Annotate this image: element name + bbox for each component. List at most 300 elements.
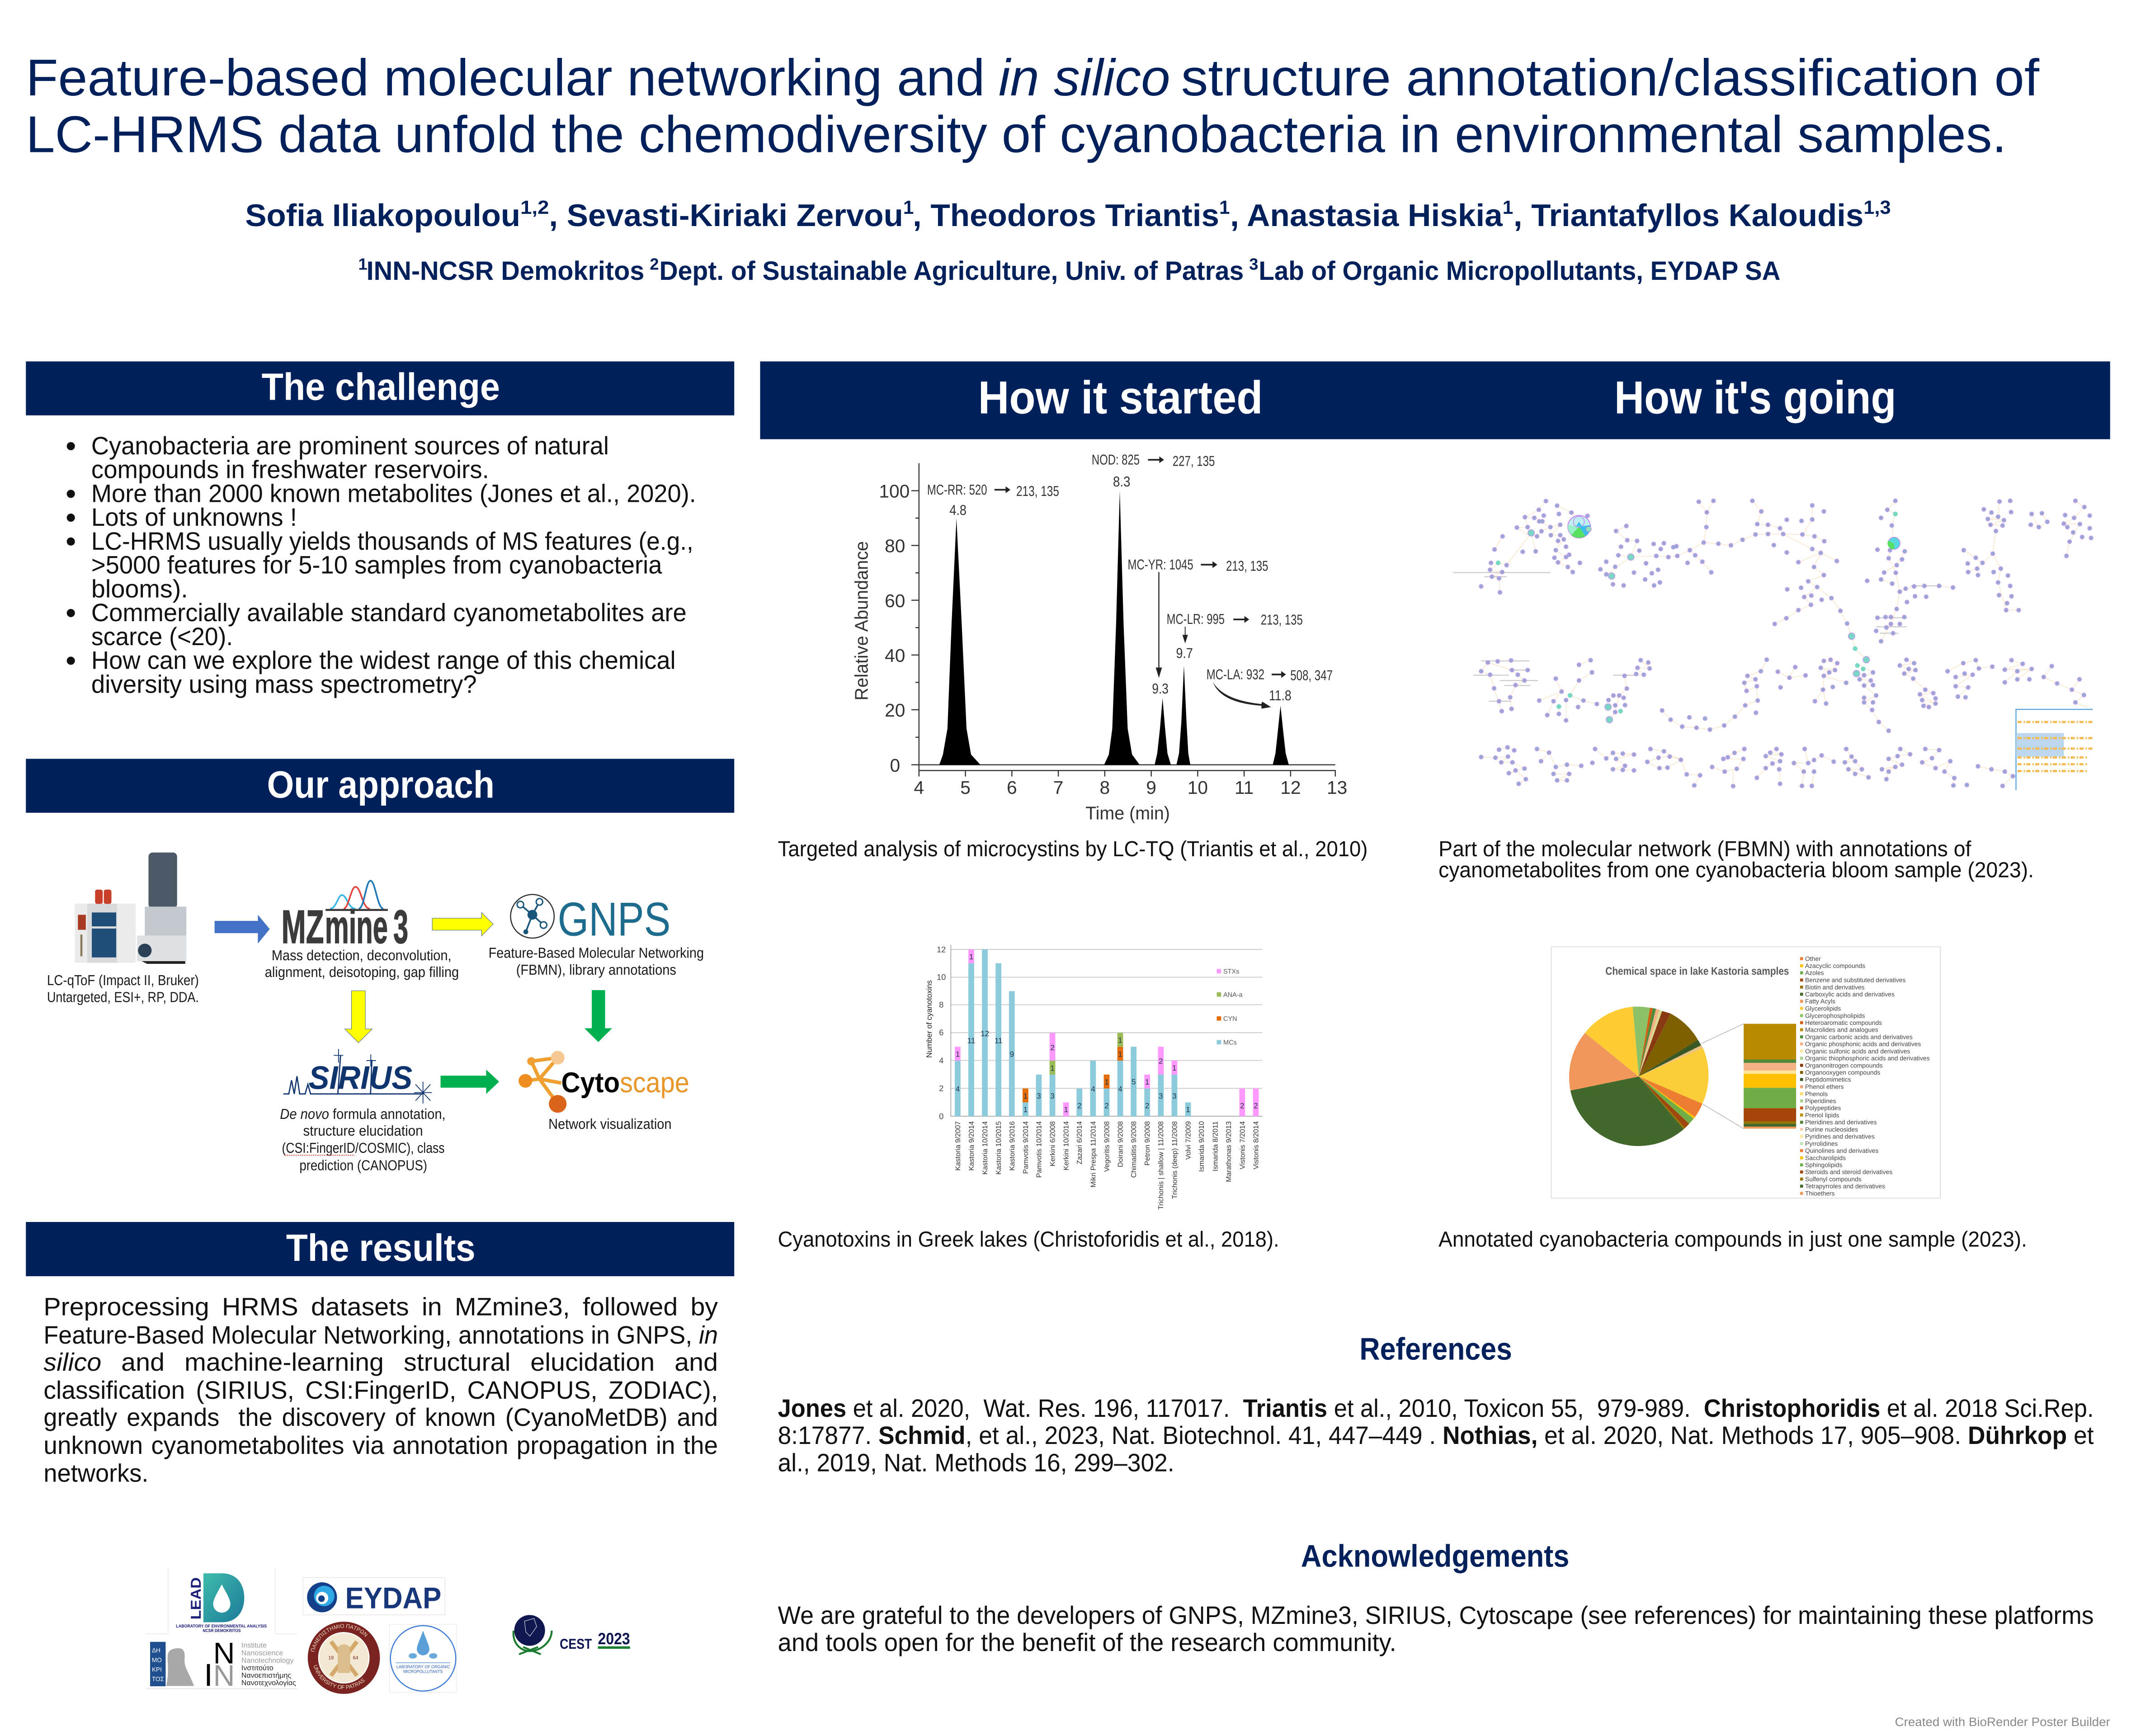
bar chart values: 4	[956, 1086, 960, 1094]
logo: Demokritos / INN: ΤΟΣ	[152, 1675, 165, 1683]
bar chart values: 11	[995, 1038, 1003, 1046]
text block: challenge bullets: More than 2000 known metabolites (Jones et al., 2020).	[91, 479, 696, 507]
network: overview inset	[2016, 709, 2093, 790]
caption: SIRIUS: (CSI:FingerID/COSMIC), class	[282, 1141, 445, 1157]
chromatogram peak labels: MC-YR: 1045	[1127, 557, 1193, 574]
logo: Demokritos / INN: Institute	[241, 1642, 267, 1651]
logo: Demokritos / INN: Nanoscience	[241, 1650, 283, 1658]
logo: CEST 2023: 2023	[598, 1629, 631, 1648]
authors: 1	[1219, 196, 1230, 218]
bar chart values: 2	[1159, 1058, 1163, 1066]
chromatogram y ticks: 100	[879, 481, 910, 502]
chromatogram y ticks: 80	[885, 536, 905, 557]
text block: results: unknown cyanometabolites via annotation propagation in the	[43, 1431, 718, 1459]
bar chart values: 2	[1254, 1103, 1258, 1111]
logo: LEAD: NCSR DEMOKRITOS	[203, 1628, 240, 1633]
text block: challenge bullets	[67, 431, 696, 698]
bar chart y axis labels: 8	[939, 1000, 944, 1010]
chromatogram peak labels: MC-RR: 520	[927, 482, 987, 499]
pie legend: Organic sulfonic acids and derivatives	[1805, 1048, 1911, 1055]
pie legend: Pyridines and derivatives	[1805, 1133, 1876, 1140]
pie legend: Organonitrogen compounds	[1805, 1062, 1884, 1069]
network: medium annotated node fill	[1531, 533, 1866, 720]
panel: how it started / how it's going header: How it's going	[1614, 373, 1896, 425]
caption: LC-qToF	[47, 973, 199, 1006]
bar chart legend: STXs	[1223, 968, 1240, 976]
caption: GNPS: (FBMN), library annotations	[516, 962, 676, 979]
bar chart legend: ANA-a	[1223, 991, 1243, 1000]
bar chart x labels: Ismarida 9/2010	[1198, 1121, 1207, 1172]
logo: University of Patras seal	[308, 1622, 380, 1694]
bar chart y axis labels: 2	[939, 1085, 944, 1094]
logo: Demokritos / INN: N	[213, 1636, 235, 1670]
chromatogram axis titles: Relative Abundance	[851, 541, 872, 700]
caption: molecular network: cyanometabolites from one cyanobacteria bloom sample (2023).	[1438, 859, 2034, 883]
bar chart values: 1	[1050, 1065, 1055, 1074]
logo: GNPS: GNPS	[558, 893, 670, 946]
text block: acknowledgements: We are grateful to the developers of GNPS, MZmine3, SIRIUS, Cytoscape (see references) for maintaining these platforms	[778, 1601, 2094, 1629]
panel: the challenge header	[26, 361, 734, 415]
pie legend: Azacyclic compounds	[1805, 962, 1866, 969]
logo: University of Patras seal: 64	[353, 1655, 358, 1661]
chromatogram peak labels: 9.3	[1152, 681, 1169, 698]
pie legend: Glycerophospholipids	[1805, 1012, 1866, 1019]
text block: challenge bullets: blooms).	[91, 574, 188, 603]
pie legend: Heteroaromatic compounds	[1805, 1019, 1883, 1026]
bar chart y axis labels: Number of cyanotoxins	[925, 980, 934, 1058]
heading: references: References	[1359, 1331, 1512, 1366]
pie legend: Quinolines and derivatives	[1805, 1147, 1880, 1154]
chromatogram peak labels: 4.8	[949, 503, 967, 519]
bar chart values: 4	[1091, 1086, 1095, 1094]
title	[26, 50, 2040, 164]
pie legend: Organic phosphonic acids and derivatives	[1805, 1041, 1922, 1047]
chromatogram axis titles	[851, 541, 1170, 824]
text block: references: Jones et al. 2020, Wat. Res. 196, 117017. Triantis et al., 2010, Toxicon 55, 979-989. Christophoridis et al. 2018 Sci.Rep.	[778, 1394, 2094, 1422]
text block: challenge bullets: LC-HRMS usually yields thousands of MS features (e.g.,	[91, 527, 693, 555]
pie legend: Steroids and steroid derivatives	[1805, 1169, 1893, 1175]
caption: LC-qToF: Untargeted, ESI+, RP, DDA.	[47, 990, 199, 1006]
logo: MZmine 3: MZ	[282, 902, 324, 954]
text block: results: networks.	[43, 1458, 148, 1487]
pie legend: Sphingolipids	[1805, 1162, 1844, 1169]
chromatogram x ticks: 6	[1007, 778, 1017, 798]
logo: EYDAP	[303, 1578, 445, 1615]
chart: chromatogram	[851, 452, 1347, 824]
logo: SIRIUS: SIRIUS	[309, 1060, 412, 1097]
pie legend: Prenol lipids	[1805, 1112, 1840, 1118]
text block: references: al., 2019, Nat. Methods 16, 299–302.	[778, 1448, 1174, 1477]
bar chart values: 1	[1023, 1107, 1028, 1115]
bar chart values: 2	[1104, 1103, 1109, 1111]
bar chart values: 4	[1118, 1086, 1122, 1094]
bar chart values	[956, 954, 1258, 1115]
chromatogram x ticks: 12	[1280, 778, 1301, 798]
chromatogram y ticks: 20	[885, 700, 905, 721]
bar chart x labels: Kastoria 10/2015	[995, 1121, 1004, 1175]
chromatogram peak labels: 9.7	[1176, 646, 1193, 662]
text block: acknowledgements: and tools open for the benefit of the research community.	[778, 1628, 1396, 1656]
logo: Demokritos / INN: Νανοτεχνολογίας	[241, 1680, 297, 1688]
bar chart values: 1	[1186, 1107, 1190, 1115]
bar chart x labels: Doirani 9/2008	[1117, 1121, 1125, 1167]
pie legend: Carboxylic acids and derivatives	[1805, 991, 1896, 998]
logo: MZmine 3	[282, 881, 408, 954]
caption: targeted analysis: Targeted analysis of microcystins by LC-TQ (Triantis et al., 2010)	[778, 839, 1367, 862]
logo: LEAD: LABORATORY OF ENVIRONMENTAL ANALYSIS	[176, 1623, 267, 1629]
logo: MZmine 3: mine	[325, 902, 388, 954]
bar chart grid and axes	[951, 949, 1263, 1088]
network: second large annotated node	[1887, 537, 1900, 549]
arrow: blue to MZmine	[215, 915, 270, 943]
bar chart x labels: Mikri Prespa 11/2014	[1090, 1121, 1098, 1188]
bar chart values: 3	[1172, 1093, 1177, 1101]
bars: CYN	[1023, 1047, 1123, 1102]
caption: SIRIUS: De novo formula annotation,	[280, 1107, 446, 1123]
logo: LEAD	[146, 1568, 297, 1634]
caption: LC-qToF: LC-qToF (Impact II, Bruker)	[47, 973, 199, 989]
chart: cyanotoxins stacked bars	[925, 945, 1263, 1210]
panel: the challenge header: The challenge	[262, 366, 500, 408]
bar chart values: 2	[1240, 1103, 1245, 1111]
text block: references	[778, 1394, 2094, 1477]
chromatogram peak labels: 213, 135	[1261, 613, 1303, 629]
network nodes: purple rings	[1481, 501, 2091, 786]
arrow: yellow to GNPS	[432, 912, 493, 936]
title: in silico	[999, 50, 1170, 108]
pie legend: Pteridines and derivatives	[1805, 1119, 1878, 1126]
arrow: green SIRIUS to Cytoscape	[441, 1070, 499, 1094]
caption: MZmine: Mass detection, deconvolution,	[272, 948, 452, 964]
affiliations: 3	[1249, 255, 1259, 274]
bar chart values: 9	[1010, 1051, 1014, 1060]
chromatogram peak labels: MC-LA: 932	[1207, 667, 1264, 684]
text block: results: Feature-Based Molecular Networking, annotations in GNPS, in	[43, 1321, 718, 1349]
bar chart x labels: Chimaditis 9/2008	[1131, 1121, 1139, 1178]
bar chart values: 1	[969, 954, 973, 962]
bar chart y axis labels: 10	[937, 973, 947, 983]
chromatogram x ticks: 4	[914, 778, 925, 798]
bar chart values: 1	[956, 1051, 960, 1060]
chromatogram y ticks: 60	[885, 591, 905, 611]
text block: acknowledgements	[778, 1601, 2094, 1656]
bar chart values: 2	[1077, 1103, 1082, 1111]
pie legend	[1800, 955, 1931, 1197]
text block: challenge bullets: compounds in freshwater reservoirs.	[91, 455, 489, 484]
panel: our approach header: Our approach	[267, 764, 495, 806]
pie legend: Phenol ethers	[1805, 1084, 1845, 1090]
text block: results	[43, 1293, 719, 1487]
logo: CEST 2023	[514, 1615, 631, 1654]
logo: Laboratory of Organic Micropollutants: MICROPOLLUTANTS	[403, 1669, 443, 1674]
chromatogram peak labels: NOD: 825	[1092, 452, 1140, 469]
network: small annotated nodes	[1498, 514, 1896, 711]
bar chart values: 3	[1037, 1093, 1041, 1101]
bar chart values: 11	[967, 1038, 975, 1046]
text block: references: 8:17877. Schmid, et al., 2023, Nat. Biotechnol. 41, 447–449 . Nothias, et al. 2020, Nat. Methods 17, 905–908. Dührkop et	[778, 1421, 2094, 1449]
pie legend: Biotin and derivatives	[1805, 984, 1866, 991]
panel: how it started / how it's going header: How it started	[978, 373, 1263, 425]
authors: 1,2	[520, 196, 549, 218]
text block: challenge bullets: Commercially available standard cyanometabolites are	[91, 598, 687, 627]
chart: molecular network	[1453, 501, 2093, 790]
heading: acknowledgements: Acknowledgements	[1301, 1538, 1569, 1573]
bar chart values: 1	[1118, 1051, 1122, 1060]
logo: CEST 2023: CEST	[560, 1637, 593, 1653]
chromatogram x ticks: 13	[1327, 778, 1347, 798]
bar chart x labels: Kastoria 10/2014	[982, 1121, 990, 1175]
caption: cyanotoxins: Cyanotoxins in Greek lakes (Christoforidis et al., 2018).	[778, 1229, 1279, 1252]
logo: Cytoscape: scape	[620, 1068, 689, 1099]
logo: Demokritos / INN: ΜΟ	[152, 1656, 162, 1663]
affiliations: 2	[650, 255, 659, 274]
chromatogram peak labels: 11.8	[1269, 688, 1292, 704]
caption: MZmine	[265, 948, 459, 981]
title: structure annotation/classification of	[1181, 50, 2040, 108]
network nodes: blue centres	[1481, 501, 2091, 786]
pie legend: Saccharolipids	[1805, 1155, 1847, 1161]
bar chart y axis labels: 0	[939, 1112, 944, 1122]
bar chart legend	[1217, 968, 1243, 1047]
bar chart y axis labels: 12	[937, 945, 947, 955]
bar chart values: 3	[1159, 1093, 1163, 1101]
text block: results: classification (SIRIUS, CSI:FingerID, CANOPUS, ZODIAC),	[43, 1376, 718, 1404]
bar chart legend: CYN	[1223, 1015, 1238, 1024]
chromatogram x ticks: 8	[1100, 778, 1110, 798]
chromatogram peak labels: MC-LR: 995	[1167, 612, 1225, 628]
authors: , Triantafyllos Kaloudis	[1514, 198, 1863, 233]
icon: LC-qToF instrument	[75, 853, 186, 964]
bar chart x labels: Petron 9/2008	[1144, 1121, 1152, 1165]
caption: MZmine: alignment, deisotoping, gap filling	[265, 965, 459, 981]
authors: , Theodoros Triantis	[913, 198, 1219, 233]
title: LC-HRMS data unfold the chemodiversity of cyanobacteria in environmental samples.	[26, 107, 2007, 164]
pie connector lines	[1702, 1024, 1744, 1129]
bar chart x labels: Trichonis (deep) 11/2008	[1171, 1121, 1179, 1199]
caption: GNPS	[489, 946, 704, 979]
logo: Cytoscape	[519, 1051, 689, 1113]
caption: SIRIUS	[280, 1107, 446, 1175]
bar chart values: 1	[1064, 1107, 1068, 1115]
logo: Demokritos / INN	[146, 1636, 297, 1693]
bar chart x labels: Kastoria 9/2007	[955, 1121, 963, 1171]
pie legend: Fatty Acyls	[1805, 998, 1836, 1005]
pie legend: Piperidines	[1805, 1098, 1837, 1104]
bar chart x labels: Kerkini 6/2008	[1050, 1121, 1058, 1166]
bar chart x labels: Vegoritis 9/2008	[1103, 1121, 1112, 1172]
authors: , Anastasia Hiskia	[1230, 198, 1503, 233]
bars: ANA-a	[1050, 1033, 1123, 1075]
pie legend: Peptidomimetics	[1805, 1076, 1852, 1083]
logo: SIRIUS	[283, 1049, 432, 1104]
bar chart values: 2	[1050, 1045, 1055, 1053]
chromatogram y ticks: 40	[885, 646, 905, 666]
bar chart x labels: Zazari 6/2014	[1076, 1121, 1085, 1165]
text block: challenge bullets: Lots of unknowns !	[91, 503, 297, 531]
chromatogram y ticks	[879, 481, 910, 776]
chromatogram y ticks: 0	[890, 755, 900, 776]
pie legend: Other	[1805, 955, 1821, 962]
bar chart values: 1	[1145, 1079, 1149, 1087]
bar chart x labels: Pamvotis 9/2014	[1023, 1121, 1031, 1174]
authors: 1	[903, 196, 914, 218]
chromatogram peak labels: 8.3	[1113, 474, 1131, 491]
authors	[245, 196, 1891, 233]
workflow diagram	[47, 853, 704, 1175]
caption: molecular network	[1438, 839, 2034, 883]
chromatogram peak labels: 227, 135	[1173, 453, 1215, 470]
bar chart baseline	[951, 945, 1263, 1116]
text block: challenge bullets: Cyanobacteria are prominent sources of natural	[91, 431, 609, 460]
logo: Demokritos / INN: ΔΗ	[152, 1647, 160, 1654]
panel: our approach header	[26, 759, 734, 813]
bar chart values: 12	[981, 1031, 989, 1039]
authors: , Sevasti-Kiriaki Zervou	[549, 198, 903, 233]
logo: Demokritos / INN: ΚΡΙ	[152, 1666, 162, 1673]
chromatogram peaks	[939, 491, 1289, 765]
pie legend: Thioethers	[1805, 1190, 1836, 1197]
pie slices	[1569, 1007, 1708, 1146]
chromatogram x ticks: 7	[1053, 778, 1063, 798]
bar chart values: 2	[1145, 1103, 1149, 1111]
chromatogram x ticks: 9	[1146, 778, 1156, 798]
logo: Demokritos / INN: Nanotechnology	[241, 1657, 294, 1665]
text block: challenge bullets: diversity using mass spectrometry?	[91, 670, 477, 698]
panel: the results header	[26, 1222, 734, 1276]
stacked sub-bar	[1744, 1024, 1796, 1129]
logo: LEAD: LEAD	[189, 1577, 205, 1619]
pie legend: Polypeptides	[1805, 1105, 1842, 1112]
bar chart y axis labels	[925, 945, 947, 1122]
network edges	[1481, 501, 2088, 786]
logo: Laboratory of Organic Micropollutants: LABORATORY OF ORGANIC	[396, 1664, 451, 1670]
network: large annotated pie node	[1568, 515, 1591, 538]
chromatogram peak labels: 213, 135	[1226, 558, 1268, 575]
authors: 1,3	[1863, 196, 1891, 218]
text block: challenge bullets: >5000 features for 5-10 samples from cyanobacteria	[91, 550, 663, 579]
pie legend: Pyrrolidines	[1805, 1140, 1839, 1147]
caption: GNPS: Feature-Based Molecular Networking	[489, 946, 704, 962]
affiliations: INN-NCSR Demokritos	[367, 257, 645, 287]
pie legend: Organic thiophosphoric acids and derivatives	[1805, 1055, 1931, 1062]
bar chart x labels: Kastoria 9/2016	[1009, 1121, 1017, 1171]
pie legend: Macrolides and analogues	[1805, 1027, 1879, 1033]
affiliations: 1	[358, 255, 368, 274]
logo: Demokritos / INN: Ινστιτούτο	[241, 1665, 273, 1673]
bar chart y axis labels: 6	[939, 1028, 944, 1038]
caption: molecular network: Part of the molecular network (FBMN) with annotations of	[1438, 839, 1972, 862]
chromatogram peak labels: 508, 347	[1290, 668, 1333, 684]
caption: SIRIUS: prediction (CANOPUS)	[299, 1158, 427, 1175]
logo: Demokritos / INN: N	[213, 1659, 235, 1693]
caption: SIRIUS: structure elucidation	[303, 1123, 423, 1140]
pie legend: Organooxygen compounds	[1805, 1069, 1881, 1076]
chromatogram axis titles: Time (min)	[1085, 803, 1170, 824]
bar chart values: 1	[1118, 1037, 1122, 1045]
chromatogram axes	[911, 463, 1335, 777]
logos	[146, 1568, 631, 1694]
arrow: green to Cytoscape	[585, 990, 612, 1042]
logo: GNPS	[510, 893, 670, 946]
text block: results: silico and machine-learning structural elucidation and	[43, 1348, 718, 1376]
bar chart values: 1	[1104, 1079, 1109, 1087]
bar chart x labels: Kastoria 9/2014	[968, 1121, 976, 1171]
chromatogram arrows	[995, 456, 1286, 709]
panel: the results header: The results	[286, 1227, 476, 1269]
caption: Cytoscape: Network visualization	[548, 1117, 672, 1133]
logo: MZmine 3: 3	[393, 902, 408, 954]
chromatogram peak labels: 213, 135	[1016, 484, 1059, 500]
authors: Sofia Iliakopoulou	[245, 198, 520, 233]
text block: results: Preprocessing HRMS datasets in MZmine3, followed by	[43, 1293, 719, 1321]
affiliations: Lab of Organic Micropollutants, EYDAP SA	[1259, 257, 1781, 287]
authors: 1	[1503, 196, 1514, 218]
footer credit: Created with BioRender Poster Builder	[1895, 1715, 2110, 1729]
bar chart x labels: Vistonis 7/2014	[1239, 1121, 1247, 1170]
bar chart x labels	[955, 1121, 1261, 1210]
caption: annotated compounds: Annotated cyanobacteria compounds in just one sample (2023).	[1438, 1229, 2027, 1252]
pie legend: Tetrapyrroles and derivatives	[1805, 1183, 1886, 1190]
chromatogram x ticks	[914, 778, 1347, 798]
logo: Cytoscape: Cyto	[561, 1068, 620, 1099]
network: grey node labels	[1453, 572, 1938, 701]
bar chart values: 3	[1050, 1093, 1055, 1101]
logo: Demokritos / INN: Νανοεπιστήμης	[241, 1672, 292, 1680]
pie legend: Glycerolipids	[1805, 1005, 1842, 1012]
bar chart x labels: Ismarida 8/2011	[1212, 1121, 1220, 1171]
bars: STXs	[955, 949, 1259, 1116]
logo: Laboratory of Organic Micropollutants	[390, 1624, 456, 1693]
chromatogram peak labels	[927, 452, 1333, 704]
pie legend: Phenols	[1805, 1090, 1829, 1097]
affiliations: Dept. of Sustainable Agriculture, Univ. of Patras	[659, 257, 1244, 287]
logo: University of Patras seal: UNIVERSITY OF PATRAS	[312, 1664, 366, 1690]
logo: University of Patras seal: ΠΑΝΕΠΙΣΤΗΜΙΟ ΠΑΤΡΩΝ	[309, 1623, 369, 1653]
pie legend: Organic carbonic acids and derivatives	[1805, 1033, 1914, 1040]
chromatogram x ticks: 5	[960, 778, 971, 798]
affiliations	[358, 255, 1781, 287]
bar chart x labels: Volvi 7/2009	[1185, 1121, 1193, 1160]
text block: challenge bullets: scarce (<20).	[91, 622, 233, 651]
logo: University of Patras seal: 19	[328, 1655, 334, 1661]
bar chart x labels: Marathonas 9/2013	[1226, 1121, 1234, 1182]
bar chart x labels: Trichonis | shallow | 11/2008	[1158, 1121, 1166, 1210]
bar chart y axis labels: 4	[939, 1057, 944, 1066]
chart: chemical space pie	[1551, 947, 1940, 1198]
text block: challenge bullets: How can we explore the widest range of this chemical	[91, 646, 676, 675]
bar chart legend: MCs	[1223, 1039, 1238, 1047]
bar chart values: 1	[1172, 1065, 1177, 1073]
bar chart values: 5	[1132, 1079, 1136, 1087]
pie legend: Benzene and substituted derivatives	[1805, 977, 1907, 984]
chromatogram x ticks: 11	[1235, 778, 1254, 798]
chromatogram x ticks: 10	[1188, 778, 1208, 798]
bar chart values: 1	[1023, 1093, 1028, 1101]
network: medium annotated node rings	[1531, 533, 1866, 720]
arrow: yellow to SIRIUS	[344, 991, 373, 1043]
text block: results: greatly expands the discovery of known (CyanoMetDB) and	[43, 1403, 718, 1431]
pie title: Chemical space in lake Kastoria samples	[1605, 965, 1790, 977]
pie legend: Azoles	[1805, 970, 1825, 976]
pie legend: Sulfenyl compounds	[1805, 1176, 1863, 1183]
bar chart x labels: Pamvotis 10/2014	[1036, 1121, 1044, 1178]
panel: how it started / how it's going header	[760, 361, 2110, 439]
title: Feature-based molecular networking and	[26, 50, 985, 108]
bar chart x labels: Kerkini 10/2014	[1063, 1121, 1071, 1170]
bar chart x labels: Vistonis 8/2014	[1253, 1121, 1261, 1170]
logo: EYDAP: EYDAP	[345, 1581, 441, 1615]
pie legend: Purine nucleosides	[1805, 1126, 1859, 1133]
